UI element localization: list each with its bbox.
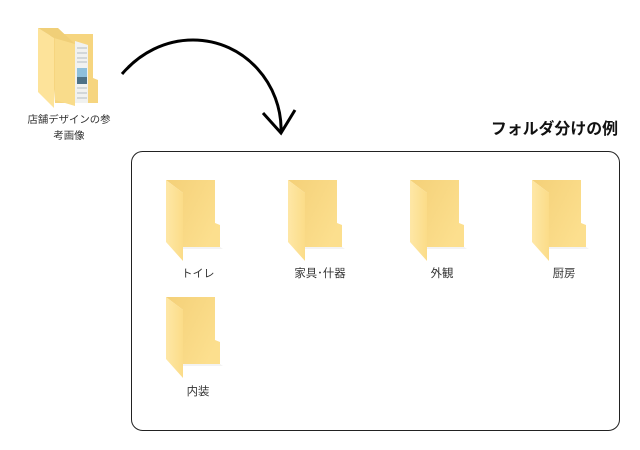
label: 外観: 外観 bbox=[431, 268, 453, 280]
label: トイレ: トイレ bbox=[182, 268, 214, 280]
label: source folder name: 考画像 bbox=[53, 131, 85, 142]
label: source folder name bbox=[27, 114, 111, 142]
panel: folder examples box bbox=[132, 152, 620, 430]
icon: folder 家具・什器 bbox=[288, 180, 345, 261]
label: 厨房: 厨房 bbox=[553, 268, 575, 280]
label: 内装: 内装 bbox=[187, 386, 209, 398]
arrow: curved arrow to the box bbox=[122, 40, 295, 133]
icon: source folder with documents bbox=[38, 28, 98, 108]
label: 家具・什器: 家具･什器 bbox=[294, 268, 346, 280]
label: source folder name: 店舗デザインの参 bbox=[27, 115, 111, 126]
heading: folder examples: フォルダ分けの例 bbox=[491, 121, 618, 138]
icon: folder トイレ bbox=[166, 180, 223, 261]
icon: folder 厨房 bbox=[532, 180, 589, 261]
icon: folder 外観 bbox=[410, 180, 467, 261]
icon: folder 内装 bbox=[166, 297, 223, 378]
